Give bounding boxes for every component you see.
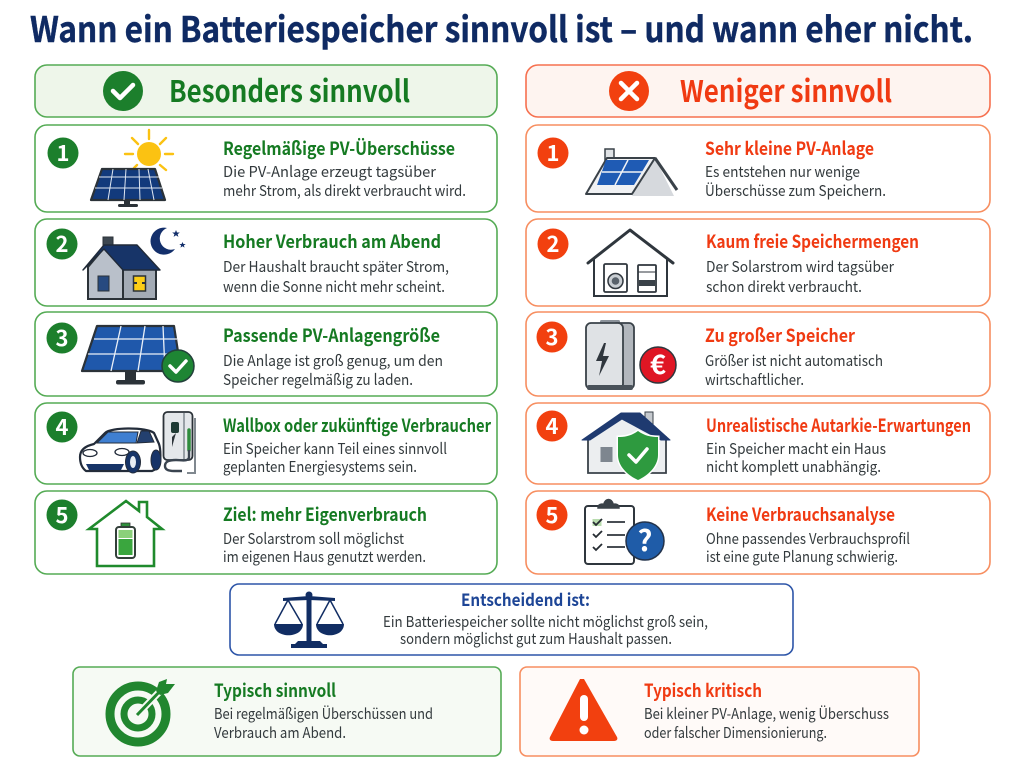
icon: warning triangle	[550, 679, 617, 741]
text: zu großer Speicher: Zu großer Speicher	[705, 322, 855, 348]
text: Speichermengen: Kaum freie Speichermengen	[706, 228, 919, 254]
icon: house with appliances	[588, 230, 673, 296]
panel: typisch kritisch	[520, 667, 919, 756]
badge 2	[46, 227, 78, 260]
card 4: Autarkie	[526, 403, 990, 484]
text: Autarkie	[706, 412, 971, 477]
badge 4	[536, 409, 568, 442]
heading: weniger sinnvoll: Weniger sinnvoll	[680, 67, 892, 111]
icon: house with shield	[582, 412, 670, 480]
heading: besonders sinnvoll: Besonders sinnvoll	[169, 67, 410, 111]
card 5: Eigenverbrauch	[35, 491, 497, 574]
icon: battery with euro: €	[650, 343, 666, 382]
text: typisch sinnvoll: Bei regelmäßigen Überschüssen und	[214, 703, 433, 724]
badge 4: 4	[56, 410, 69, 442]
badge 2	[538, 227, 568, 260]
text: Verbrauch am Abend	[223, 228, 449, 297]
icon: solar panel with check	[82, 326, 194, 384]
text: Speichermengen: Der Solarstrom wird tagsüber	[706, 256, 894, 277]
badge 2: 2	[547, 227, 559, 259]
text: Eigenverbrauch: im eigenen Haus genutzt werden.	[223, 546, 426, 567]
badge 5: 5	[56, 498, 68, 530]
text: Entscheidend ist: sondern möglichst gut zum Haushalt passen.	[400, 628, 672, 649]
icon: red cross	[609, 71, 649, 111]
badge 5	[536, 498, 568, 530]
text: typisch sinnvoll	[214, 677, 433, 743]
text: Verbrauch am Abend: wenn die Sonne nicht mehr scheint.	[223, 276, 445, 297]
text: Autarkie: Ein Speicher macht ein Haus	[706, 438, 886, 459]
badge 1: 1	[547, 136, 559, 168]
text: typisch kritisch: Bei kleiner PV-Anlage, wenig Überschuss	[644, 703, 889, 724]
text: Wallbox: Wallbox oder zukünftige Verbraucher	[223, 412, 491, 438]
text: zu großer Speicher: Größer ist nicht automatisch	[705, 350, 883, 371]
icon: battery with euro	[586, 320, 676, 390]
text: Verbrauchsanalyse: Keine Verbrauchsanalyse	[706, 501, 895, 527]
panel: typisch sinnvoll	[73, 667, 501, 756]
panel: weniger sinnvoll	[526, 65, 990, 574]
text: Wallbox: geplanten Energiesystems sein.	[223, 456, 417, 477]
badge 5: 5	[546, 498, 558, 530]
text: PV-Überschüsse: Regelmäßige PV-Überschüsse	[223, 135, 455, 161]
panel: besonders sinnvoll	[35, 65, 497, 574]
text: Verbrauch am Abend: Hoher Verbrauch am Abend	[223, 228, 441, 254]
callout: Entscheidend ist	[230, 584, 793, 655]
badge 1: 1	[57, 136, 69, 168]
text: Wallbox	[223, 412, 491, 477]
text: PV-Anlagengröße: Speicher regelmäßig zu laden.	[223, 369, 413, 390]
text: Verbrauchsanalyse	[706, 501, 910, 567]
text: typisch sinnvoll: Verbrauch am Abend.	[214, 722, 346, 743]
card 4: Wallbox	[35, 403, 497, 484]
text: zu großer Speicher	[705, 322, 883, 390]
text: PV-Anlagengröße	[223, 322, 443, 390]
card 1: kleine PV-Anlage	[526, 125, 990, 212]
text: kleine PV-Anlage	[705, 135, 886, 201]
text: kleine PV-Anlage: Sehr kleine PV-Anlage	[705, 135, 874, 161]
text: Verbrauch am Abend: Der Haushalt braucht später Strom,	[223, 256, 449, 277]
text: PV-Überschüsse: Die PV-Anlage erzeugt tagsüber	[223, 161, 436, 182]
icon: clipboard with question mark	[585, 500, 664, 564]
badge 4	[46, 410, 78, 442]
badge 3: 3	[56, 321, 68, 353]
text: Eigenverbrauch	[223, 501, 427, 567]
header: besonders sinnvoll	[35, 65, 497, 117]
text: Verbrauchsanalyse: Ohne passendes Verbrauchsprofil	[706, 528, 910, 549]
text: PV-Überschüsse: mehr Strom, als direkt verbraucht wird.	[223, 180, 466, 201]
text: Speichermengen: schon direkt verbraucht.	[706, 276, 862, 297]
icon: roof with small solar panel	[586, 149, 677, 196]
badge 1	[538, 136, 568, 168]
icon: house with battery	[89, 501, 162, 566]
text: Entscheidend ist	[383, 586, 708, 649]
text: typisch kritisch: Typisch kritisch	[644, 677, 762, 703]
text: Entscheidend ist: Entscheidend ist:	[461, 586, 590, 611]
icon: target	[110, 679, 175, 742]
text: Eigenverbrauch: Der Solarstrom soll möglichst	[223, 528, 404, 549]
badge 2: 2	[56, 227, 68, 259]
badge 4: 4	[546, 409, 559, 441]
text: Wallbox: Ein Speicher kann Teil eines sinnvoll	[223, 438, 447, 459]
icon: scales	[274, 592, 344, 648]
text: PV-Anlagengröße: Die Anlage ist groß genug, um den	[223, 350, 443, 371]
text: zu großer Speicher: wirtschaftlicher.	[705, 369, 804, 390]
badge 5	[46, 498, 78, 530]
text: typisch kritisch	[644, 677, 889, 743]
text: Eigenverbrauch: Ziel: mehr Eigenverbrauch	[223, 501, 427, 527]
text: PV-Überschüsse	[223, 135, 466, 201]
card 2: Speichermengen	[526, 219, 990, 306]
icon: green check	[103, 71, 143, 111]
card 3: zu großer Speicher	[526, 312, 990, 396]
text: kleine PV-Anlage: Überschüsse zum Speichern.	[705, 180, 886, 201]
badge 3	[536, 320, 568, 352]
icon: clipboard with question mark: ?	[638, 518, 652, 560]
text: Speichermengen	[706, 228, 919, 297]
badge 3: 3	[546, 320, 558, 352]
text: typisch sinnvoll: Typisch sinnvoll	[214, 677, 336, 703]
icon: sun and solar panel	[91, 130, 173, 207]
text: kleine PV-Anlage: Es entstehen nur wenige	[705, 161, 860, 182]
text: Autarkie: nicht komplett unabhängig.	[706, 456, 881, 477]
card 2: Verbrauch am Abend	[35, 219, 497, 306]
text: PV-Anlagengröße: Passende PV-Anlagengröße	[223, 322, 440, 348]
card 5: Verbrauchsanalyse	[526, 491, 990, 574]
card 3: PV-Anlagengröße	[35, 312, 497, 396]
header: weniger sinnvoll	[526, 65, 990, 117]
icon: car and wallbox	[80, 412, 195, 473]
text: typisch kritisch: oder falscher Dimensionierung.	[644, 722, 827, 743]
card 1: PV-Überschüsse	[35, 125, 497, 212]
icon: house at night	[83, 228, 186, 299]
text: Verbrauchsanalyse: ist eine gute Planung schwierig.	[706, 546, 898, 567]
text: Entscheidend ist: Ein Batteriespeicher sollte nicht möglichst groß sein,	[383, 611, 708, 632]
badge 1	[48, 136, 78, 168]
badge 3	[46, 321, 78, 354]
